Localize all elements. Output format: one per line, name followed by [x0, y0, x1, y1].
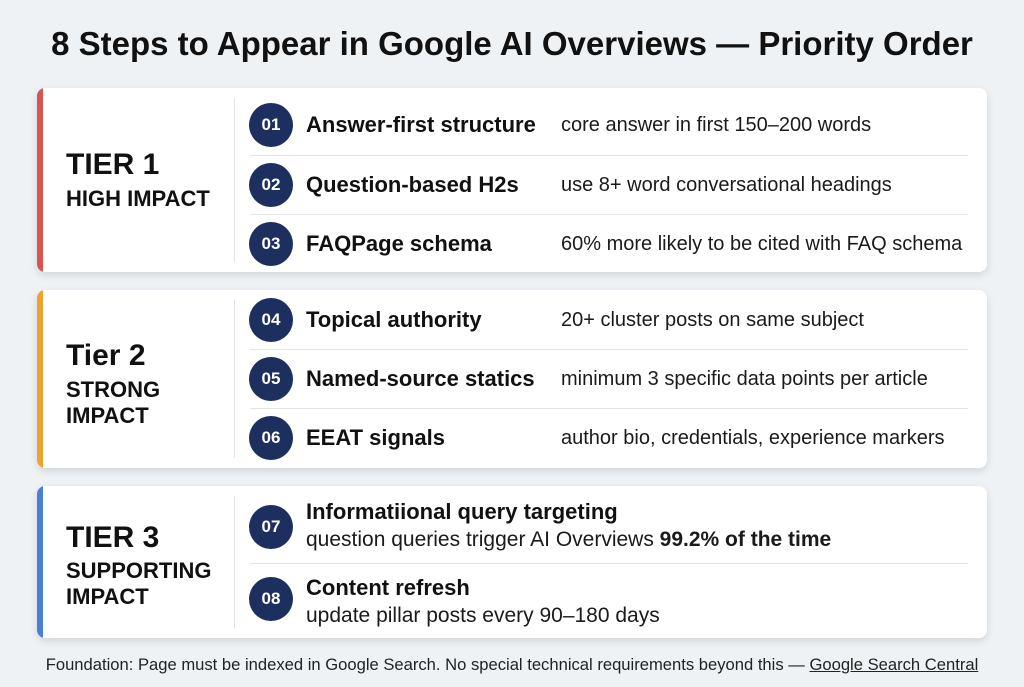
- tier 3 label: TIER 3: [66, 521, 159, 554]
- step 07: [249, 499, 831, 551]
- step 03: 03: [262, 234, 280, 253]
- tier 2 label: [66, 339, 160, 428]
- tier 3 label: SUPPORTING: [66, 558, 211, 583]
- step 06: [249, 416, 945, 460]
- step 04: Topical authority: [306, 307, 482, 332]
- tier 3 label: [66, 521, 211, 609]
- step 01: Answer-first structure: [306, 112, 536, 137]
- step 06: author bio, credentials, experience markers: [561, 427, 945, 449]
- step 04: [249, 298, 864, 342]
- tier 2 label: STRONG: [66, 377, 160, 402]
- tier 1 label: TIER 1: [66, 148, 159, 181]
- step 05: Named-source statics: [306, 366, 535, 391]
- step 02: use 8+ word conversational headings: [561, 174, 892, 196]
- step 01: [249, 103, 871, 147]
- step 08: 08: [262, 589, 280, 608]
- footer note: Foundation: Page must be indexed in Google Search. No special technical requirements beyond this — Google Search Central: [46, 655, 978, 674]
- step 04: 20+ cluster posts on same subject: [561, 309, 864, 331]
- step 05: 05: [262, 369, 280, 388]
- step 08: [249, 575, 660, 627]
- panel: tier 3: [37, 486, 987, 638]
- step 03: 60% more likely to be cited with FAQ schema: [561, 233, 962, 255]
- step 03: [249, 222, 962, 266]
- step 01: 01: [262, 115, 280, 134]
- tier 2 label: Tier 2: [66, 339, 146, 372]
- step 06: EEAT signals: [306, 425, 445, 450]
- step 02: 02: [262, 175, 280, 194]
- step 04: 04: [262, 310, 280, 329]
- step 01: core answer in first 150–200 words: [561, 114, 871, 136]
- step 06: 06: [262, 428, 280, 447]
- step 07: Informatiional query targeting: [306, 499, 618, 524]
- step 07: 07: [262, 517, 280, 536]
- step 08: Content refresh: [306, 575, 470, 600]
- tier 1 label: [66, 148, 210, 211]
- step 02: [249, 163, 892, 207]
- step 02: Question-based H2s: [306, 172, 519, 197]
- title: 8 Steps to Appear in Google AI Overviews — Priority Order: [51, 25, 973, 62]
- tier 3 label: IMPACT: [66, 584, 149, 609]
- panel: tier 2: [37, 290, 987, 468]
- tier 1 label: HIGH IMPACT: [66, 186, 210, 211]
- step 08: update pillar posts every 90–180 days: [306, 604, 660, 627]
- tier 2 label: IMPACT: [66, 403, 149, 428]
- step 05: [249, 357, 928, 401]
- step 03: FAQPage schema: [306, 231, 492, 256]
- step 05: minimum 3 specific data points per article: [561, 368, 928, 390]
- panel: tier 1: [37, 88, 987, 272]
- step 07: question queries trigger AI Overviews 99.2% of the time: [306, 528, 831, 551]
